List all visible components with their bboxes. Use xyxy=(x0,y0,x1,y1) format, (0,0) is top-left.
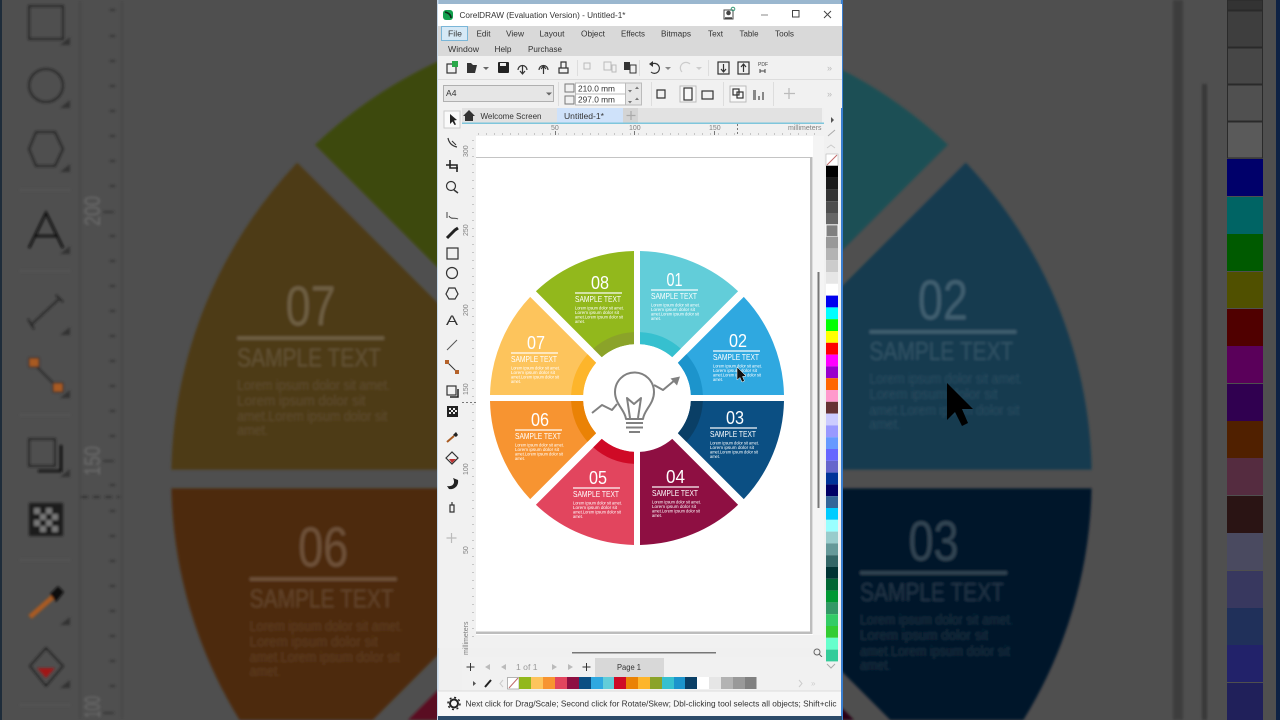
page dimensions: 297.0 mm xyxy=(578,94,615,104)
menu bar: Table xyxy=(740,28,759,38)
vertical ruler: 50 xyxy=(463,546,470,554)
blurred wheel text: amet.Lorem ipsum dolor sit xyxy=(869,403,1020,419)
page size dropdown xyxy=(444,86,554,102)
horizontal ruler: 100 xyxy=(629,125,641,132)
text block 05: Lorem ipsum dolor sit amet. xyxy=(573,500,622,506)
text block 08: Lorem ipsum dolor sit xyxy=(575,310,620,315)
blurred wheel text: SAMPLE TEXT xyxy=(869,336,1013,366)
segment 02 xyxy=(678,297,784,395)
text block 06: 06 xyxy=(531,410,549,430)
blurred wheel text xyxy=(237,268,1023,680)
text block 01: amet.Lorem ipsum dolor sit xyxy=(651,312,700,316)
icon: CorelDRAW logo xyxy=(443,10,453,20)
text block 07: amet. xyxy=(511,379,521,384)
vertical ruler: 250 xyxy=(463,224,470,236)
menu bar xyxy=(438,26,842,56)
segment 08 xyxy=(536,251,634,357)
blurred wheel text: Lorem ipsum dolor sit amet. xyxy=(250,619,403,635)
title bar xyxy=(438,4,842,26)
window title: CorelDRAW (Evaluation Version) - Untitled-1* xyxy=(460,10,626,20)
text block 01 xyxy=(651,270,700,321)
blurred wheel text: 03 xyxy=(909,509,959,572)
blurred wheel text: Lorem ipsum dolor sit xyxy=(237,393,365,409)
menu bar: Tools xyxy=(775,28,794,38)
text block 02 xyxy=(713,331,762,382)
blurred left toolbox icons xyxy=(20,6,70,705)
text block 04: amet.Lorem ipsum dolor sit xyxy=(652,508,701,514)
text block 04: amet. xyxy=(652,513,662,518)
icon: light bulb with rising arrow xyxy=(592,372,680,432)
blurred wheel text: Lorem ipsum dolor sit xyxy=(250,634,378,650)
menu bar: Layout xyxy=(540,28,565,38)
text block 04 xyxy=(652,467,701,518)
icon: settings gear xyxy=(448,698,460,710)
blurred right colour palette xyxy=(1227,0,1263,720)
text block 08: 08 xyxy=(591,273,609,293)
text block 08: amet. xyxy=(575,319,585,324)
menu bar: Help xyxy=(494,44,512,54)
text block 08: SAMPLE TEXT xyxy=(575,294,621,304)
text block 03: Lorem ipsum dolor sit xyxy=(710,445,755,450)
segment 05 xyxy=(536,439,634,545)
property bar xyxy=(438,80,842,108)
text block 06: Lorem ipsum dolor sit xyxy=(515,447,560,452)
text block 06: Lorem ipsum dolor sit amet. xyxy=(515,442,564,448)
blurred wheel text: amet.Lorem ipsum dolor sit xyxy=(250,650,400,666)
menu bar: Effects xyxy=(621,28,645,38)
blurred wheel text: Lorem ipsum dolor sit amet. xyxy=(237,378,390,394)
horizontal ruler: millimeters xyxy=(788,125,822,132)
horizontal canvas scrollbar xyxy=(572,652,716,654)
application window xyxy=(437,0,843,720)
text block 07: 07 xyxy=(527,333,545,353)
status text: Next click for Drag/Scale; Second click for Rotate/Skew; Dbl-clicking tool selects all objects; Shift+clic xyxy=(466,698,837,708)
blurred right scrollbars xyxy=(1173,0,1207,720)
menu bar: Object xyxy=(581,28,606,38)
vertical ruler: 100 xyxy=(463,463,470,475)
menu bar: View xyxy=(506,28,525,38)
text block 05 xyxy=(573,468,622,519)
text block 08 xyxy=(575,273,624,324)
blurred wheel text: amet.Lorem ipsum dolor sit xyxy=(237,409,387,425)
text block 06: amet.Lorem ipsum dolor sit xyxy=(515,452,564,456)
standard toolbar icons xyxy=(438,56,842,80)
text block 07: SAMPLE TEXT xyxy=(511,354,557,364)
text block 06 xyxy=(515,410,564,461)
text block 03: SAMPLE TEXT xyxy=(710,429,756,439)
vertical ruler: 300 xyxy=(463,145,470,157)
text block 05: SAMPLE TEXT xyxy=(573,489,619,499)
segment 07 xyxy=(490,297,596,395)
text block 04: Lorem ipsum dolor sit xyxy=(652,504,697,509)
text block 01: Lorem ipsum dolor sit amet. xyxy=(651,302,700,308)
blurred wheel text: 02 xyxy=(918,268,968,331)
text block 05: 05 xyxy=(589,468,607,488)
blurred left ruler xyxy=(80,1,122,719)
menu bar: Text xyxy=(708,28,724,38)
blurred left ruler: 100 xyxy=(80,696,105,718)
segment 03 xyxy=(678,401,784,499)
text block 05: amet. xyxy=(573,514,583,519)
canvas and page xyxy=(476,136,824,648)
page size dropdown: A4 xyxy=(446,88,457,98)
text block 07: Lorem ipsum dolor sit amet. xyxy=(511,366,560,370)
text block 02: Lorem ipsum dolor sit xyxy=(713,368,758,373)
page navigator: Page 1 xyxy=(617,662,641,672)
text block 08: amet.Lorem ipsum dolor sit xyxy=(575,314,624,320)
blurred wheel text: Lorem ipsum dolor sit amet. xyxy=(869,372,1023,388)
blurred wheel text: amet. xyxy=(237,423,268,439)
left toolbox xyxy=(438,108,462,648)
menu bar: Purchase xyxy=(528,44,562,54)
text block 01: Lorem ipsum dolor sit xyxy=(651,307,696,312)
blurred wheel text: Lorem ipsum dolor sit xyxy=(860,628,988,644)
document tabs xyxy=(462,108,824,124)
segment 06 xyxy=(490,401,596,499)
blurred wheel text: SAMPLE TEXT xyxy=(237,342,381,372)
text block 03 xyxy=(710,408,759,459)
standard toolbar icons: » xyxy=(827,63,832,73)
document tabs: Untitled-1* xyxy=(564,111,605,121)
blurred wheel text: 07 xyxy=(286,275,336,338)
text block 03: Lorem ipsum dolor sit amet. xyxy=(710,440,759,446)
vertical canvas scrollbar xyxy=(818,272,820,508)
infographic wheel xyxy=(490,251,784,545)
property bar: » xyxy=(827,89,832,99)
page navigator: 1 of 1 xyxy=(516,662,538,672)
text block 03: 03 xyxy=(726,408,744,428)
left toolbox: A xyxy=(446,312,459,328)
text block 02: Lorem ipsum dolor sit amet. xyxy=(713,364,762,368)
bottom document palette: » xyxy=(811,679,816,688)
blurred left ruler: 200 xyxy=(80,196,105,226)
text block 03: amet. xyxy=(710,454,720,459)
page dimensions xyxy=(565,83,642,105)
blurred wheel text: amet. xyxy=(250,664,281,680)
standard toolbar icons: PDF xyxy=(758,62,768,68)
horizontal ruler: 50 xyxy=(551,125,559,132)
bottom document palette xyxy=(462,677,841,691)
vertical ruler: millimeters xyxy=(463,621,470,655)
text block 01: SAMPLE TEXT xyxy=(651,291,697,301)
text block 07: amet.Lorem ipsum dolor sit xyxy=(511,374,560,380)
horizontal ruler xyxy=(462,124,824,136)
page dimensions: 210.0 mm xyxy=(578,84,615,94)
text block 02: amet.Lorem ipsum dolor sit xyxy=(713,372,762,378)
icon: mouse cursor xyxy=(737,367,746,382)
segment 01 xyxy=(640,251,738,357)
text block 06: amet. xyxy=(515,456,525,461)
blurred wheel text: SAMPLE TEXT xyxy=(860,577,1004,607)
text block 04: Lorem ipsum dolor sit amet. xyxy=(652,500,701,504)
text block 02: amet. xyxy=(713,377,723,382)
vertical ruler xyxy=(462,124,476,655)
blurred wheel text: Lorem ipsum dolor sit xyxy=(869,387,998,403)
menu bar: Window xyxy=(448,44,480,54)
blurred cursor xyxy=(947,383,973,426)
text block 02: SAMPLE TEXT xyxy=(713,352,759,362)
text block 07 xyxy=(511,333,560,384)
vertical ruler: 150 xyxy=(463,383,470,395)
horizontal ruler: 150 xyxy=(709,125,721,132)
text block 01: 01 xyxy=(666,270,682,290)
blurred wheel text: 06 xyxy=(298,516,348,579)
text block 02: 02 xyxy=(729,331,747,351)
right colour palette xyxy=(824,108,841,691)
text block 06: SAMPLE TEXT xyxy=(515,431,561,441)
document tabs: Welcome Screen xyxy=(480,111,542,121)
window controls xyxy=(724,7,831,19)
blurred left ruler: 150 xyxy=(80,446,105,476)
text block 04: SAMPLE TEXT xyxy=(652,488,698,498)
menu bar: Bitmaps xyxy=(661,28,691,38)
text block 08: Lorem ipsum dolor sit amet. xyxy=(575,306,624,310)
blurred wheel text: Lorem ipsum dolor sit amet. xyxy=(860,613,1013,629)
menu bar: File xyxy=(448,28,462,38)
menu bar: Edit xyxy=(476,28,491,38)
vertical ruler: 200 xyxy=(463,304,470,316)
text block 04: 04 xyxy=(666,467,685,487)
blurred wheel text: amet. xyxy=(869,417,901,433)
text block 07: Lorem ipsum dolor sit xyxy=(511,370,556,375)
icon: zoom corner xyxy=(814,649,822,657)
blurred wheel text: SAMPLE TEXT xyxy=(250,583,394,613)
text block 05: Lorem ipsum dolor sit xyxy=(573,505,618,510)
blurred enlarged wheel xyxy=(171,19,1092,720)
page navigator xyxy=(462,657,824,677)
text block 05: amet.Lorem ipsum dolor sit xyxy=(573,510,622,514)
status bar xyxy=(438,691,842,720)
text block 03: amet.Lorem ipsum dolor sit xyxy=(710,450,759,454)
blurred wheel text: amet. xyxy=(860,658,891,674)
text block 01: amet. xyxy=(651,316,661,321)
segment 04 xyxy=(640,439,738,545)
blurred wheel text: amet.Lorem ipsum dolor sit xyxy=(860,644,1010,660)
